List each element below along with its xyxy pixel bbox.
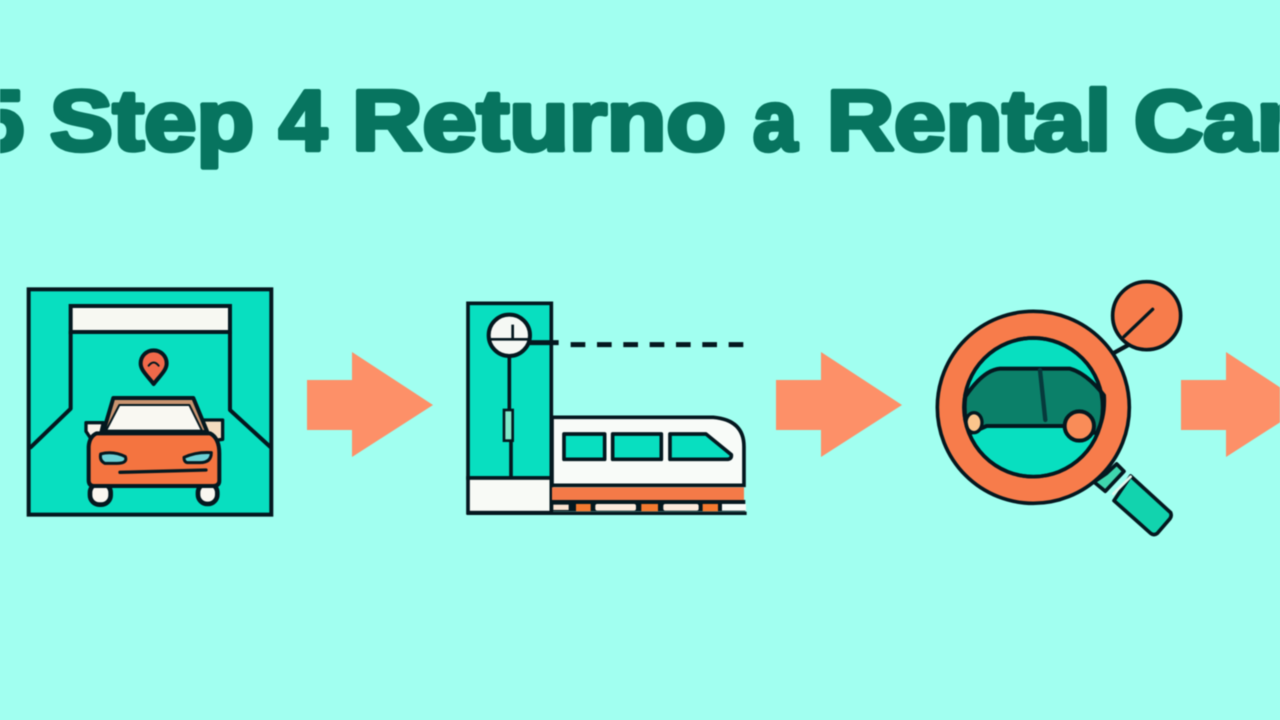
train stripe xyxy=(552,487,744,500)
train body xyxy=(552,417,744,485)
arrow 1 xyxy=(307,352,433,457)
title: Returno xyxy=(352,74,726,169)
garage walls xyxy=(31,332,270,447)
icon: magnifying glass over car xyxy=(937,282,1181,535)
car wheel xyxy=(1065,411,1094,441)
title xyxy=(0,74,1280,169)
car roof xyxy=(103,398,207,432)
title: Rental xyxy=(827,74,1111,169)
left mirror xyxy=(86,423,103,439)
title: a xyxy=(753,74,798,169)
sign connector xyxy=(530,335,559,350)
arrow 2 xyxy=(776,352,902,457)
lens glass xyxy=(964,338,1103,477)
car xyxy=(86,398,223,505)
right headlight xyxy=(184,452,211,463)
dashed track line xyxy=(571,337,745,352)
lens ring xyxy=(937,311,1129,503)
right mirror xyxy=(203,420,223,441)
left headlight xyxy=(100,453,126,463)
platform block xyxy=(468,478,551,513)
station tower xyxy=(468,303,551,478)
train windows xyxy=(564,434,731,459)
garage frame xyxy=(29,289,271,515)
car silhouette xyxy=(965,369,1104,441)
title: 4 xyxy=(279,74,327,169)
garage door xyxy=(71,306,230,332)
wheels xyxy=(90,483,111,505)
windscreen xyxy=(106,405,202,431)
tag connector and circle xyxy=(1108,282,1181,356)
icon: car in garage xyxy=(29,289,271,515)
title: Step xyxy=(50,74,254,169)
post plaque xyxy=(504,410,513,441)
sign post xyxy=(509,356,511,477)
lens handle xyxy=(1094,464,1171,535)
lens rim xyxy=(964,338,1103,477)
track xyxy=(467,508,747,518)
location pin xyxy=(141,350,167,384)
car headlight xyxy=(966,413,982,433)
undercarriage xyxy=(552,500,746,511)
title: Car xyxy=(1134,74,1280,169)
grille line xyxy=(120,470,206,472)
car body xyxy=(89,433,219,486)
arrow 3 xyxy=(1181,352,1280,457)
icon: train at station xyxy=(467,303,747,513)
station clock sign xyxy=(489,315,530,356)
